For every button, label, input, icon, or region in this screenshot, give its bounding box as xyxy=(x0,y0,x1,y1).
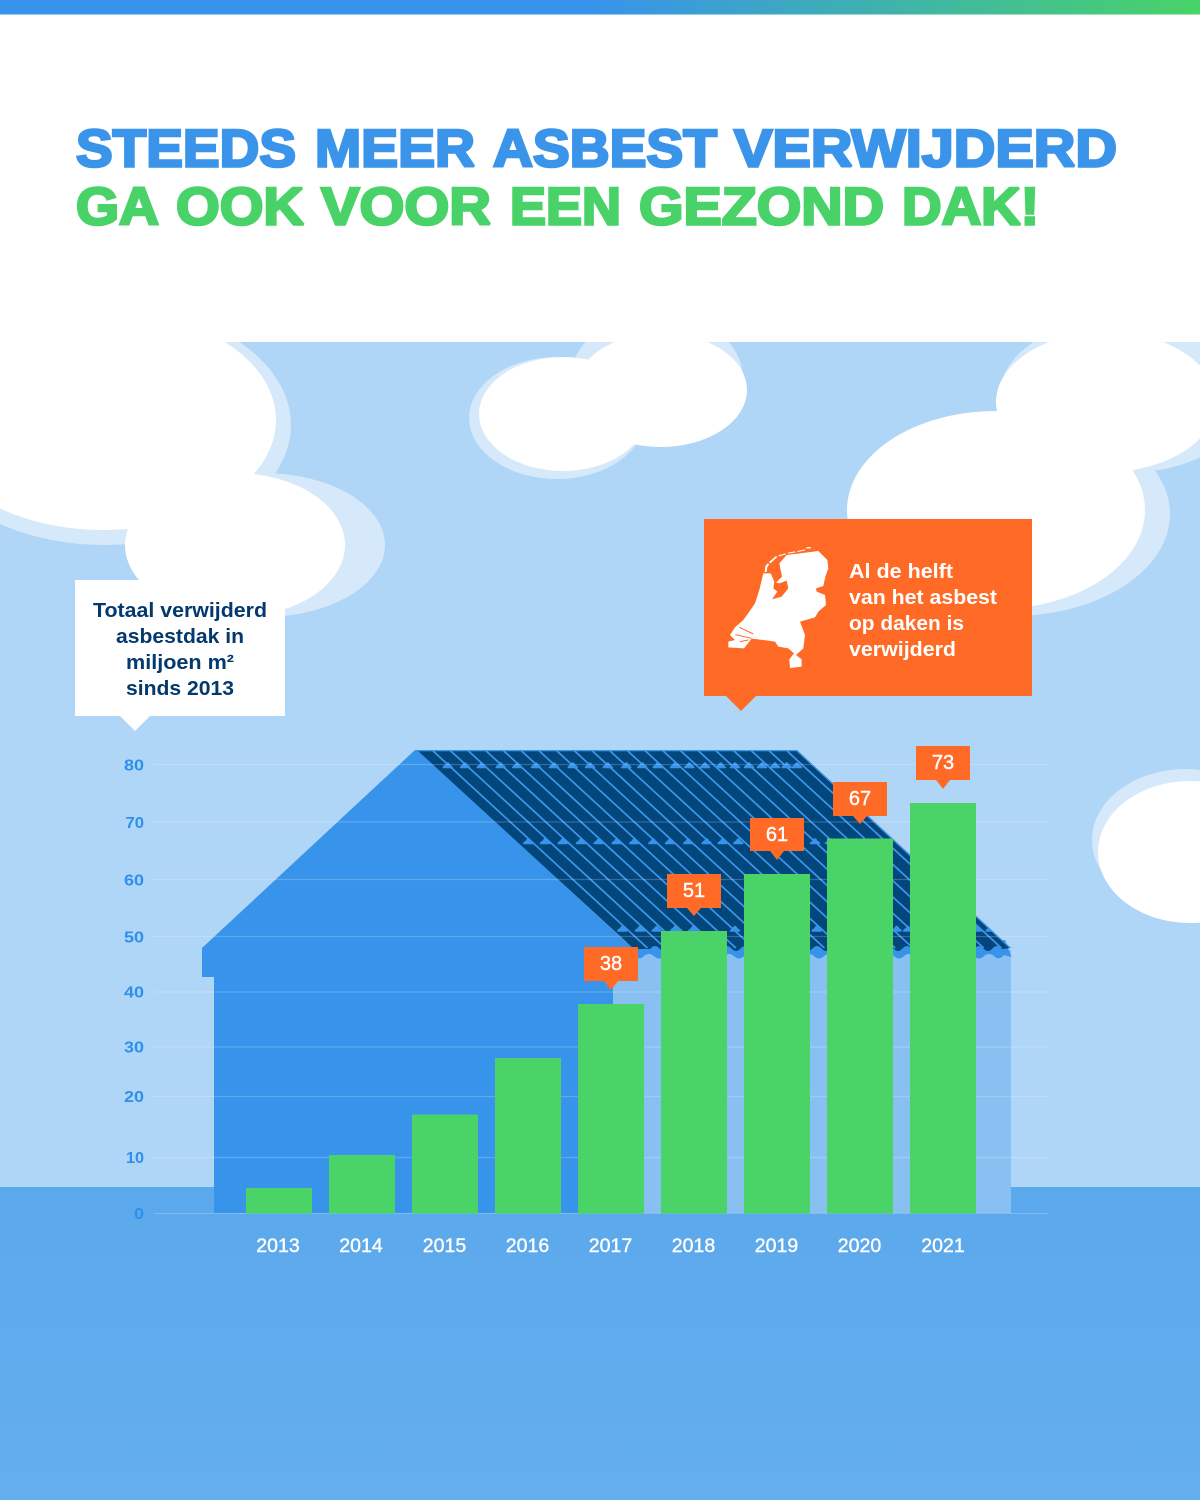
icon: map of the Netherlands xyxy=(728,547,828,668)
tag 67: 67 xyxy=(849,788,871,810)
title line 1: MEER xyxy=(315,120,475,179)
y axis labels: 0 xyxy=(134,1206,144,1223)
y axis labels xyxy=(124,758,144,1223)
x axis labels: 2018 xyxy=(672,1235,715,1257)
title line 2: GEZOND xyxy=(639,177,884,236)
house gable xyxy=(202,750,640,1213)
axis title callout: miljoen m² xyxy=(126,651,234,674)
house right wall xyxy=(613,950,1011,1213)
top gradient bar xyxy=(0,0,1200,14)
tag 73 xyxy=(916,746,970,789)
cloud: top right xyxy=(847,317,1200,616)
title line 1 xyxy=(76,120,1117,179)
value tags xyxy=(584,746,970,990)
title line 2: GA xyxy=(76,177,159,236)
title line 2: DAK! xyxy=(902,177,1039,236)
y axis labels: 60 xyxy=(124,872,144,890)
tag 51 xyxy=(667,874,721,916)
x axis labels xyxy=(256,1235,965,1257)
grid lines xyxy=(154,764,1048,1214)
y axis labels: 50 xyxy=(124,930,144,946)
roof eave scallops xyxy=(625,940,1012,958)
roof xyxy=(410,748,1020,958)
tag 51: 51 xyxy=(683,880,705,902)
axis title callout xyxy=(75,580,285,731)
title line 2: EEN xyxy=(510,177,621,236)
callout: half removed: verwijderd xyxy=(849,638,956,661)
tag 73: 73 xyxy=(932,752,954,774)
axis title callout: Totaal verwijderd xyxy=(93,599,267,622)
x axis labels: 2016 xyxy=(506,1235,549,1257)
callout: half removed: Al de helft xyxy=(849,560,953,583)
callout: half removed: op daken is xyxy=(849,612,964,635)
tag 38: 38 xyxy=(600,953,622,975)
cloud: top centre xyxy=(469,342,747,479)
y axis labels: 40 xyxy=(124,984,144,1002)
tag 61 xyxy=(750,818,804,860)
y axis labels: 70 xyxy=(126,815,144,832)
y axis labels: 10 xyxy=(126,1150,144,1167)
tag 67 xyxy=(833,782,887,824)
bar chart xyxy=(246,803,976,1214)
callout: half removed: van het asbest xyxy=(849,586,997,609)
x axis labels: 2017 xyxy=(589,1235,632,1257)
title line 1: STEEDS xyxy=(76,120,296,179)
cloud: right edge xyxy=(1092,769,1200,923)
title line 2 xyxy=(76,177,1039,236)
cloud: top left xyxy=(0,342,385,616)
x axis labels: 2014 xyxy=(339,1235,383,1257)
tag 61: 61 xyxy=(766,824,788,846)
y axis labels: 80 xyxy=(124,758,144,774)
title line 1: ASBEST xyxy=(493,120,717,179)
y axis labels: 20 xyxy=(124,1089,144,1106)
axis title callout: asbestdak in xyxy=(116,625,244,648)
x axis labels: 2020 xyxy=(838,1235,881,1257)
ground xyxy=(0,1187,1200,1500)
callout: half removed xyxy=(704,519,1032,711)
title line 2: VOOR xyxy=(321,177,491,236)
x axis labels: 2015 xyxy=(423,1235,466,1257)
house xyxy=(202,748,1020,1213)
y axis labels: 30 xyxy=(124,1040,144,1056)
axis title callout: sinds 2013 xyxy=(126,677,234,700)
clouds xyxy=(0,305,1200,923)
title line 1: VERWIJDERD xyxy=(734,120,1117,179)
tag 38 xyxy=(584,947,638,990)
title line 2: OOK xyxy=(176,177,304,236)
sky xyxy=(0,342,1200,1187)
title xyxy=(76,120,1117,236)
x axis labels: 2013 xyxy=(256,1235,300,1257)
x axis labels: 2021 xyxy=(921,1235,965,1257)
x axis labels: 2019 xyxy=(755,1235,798,1257)
